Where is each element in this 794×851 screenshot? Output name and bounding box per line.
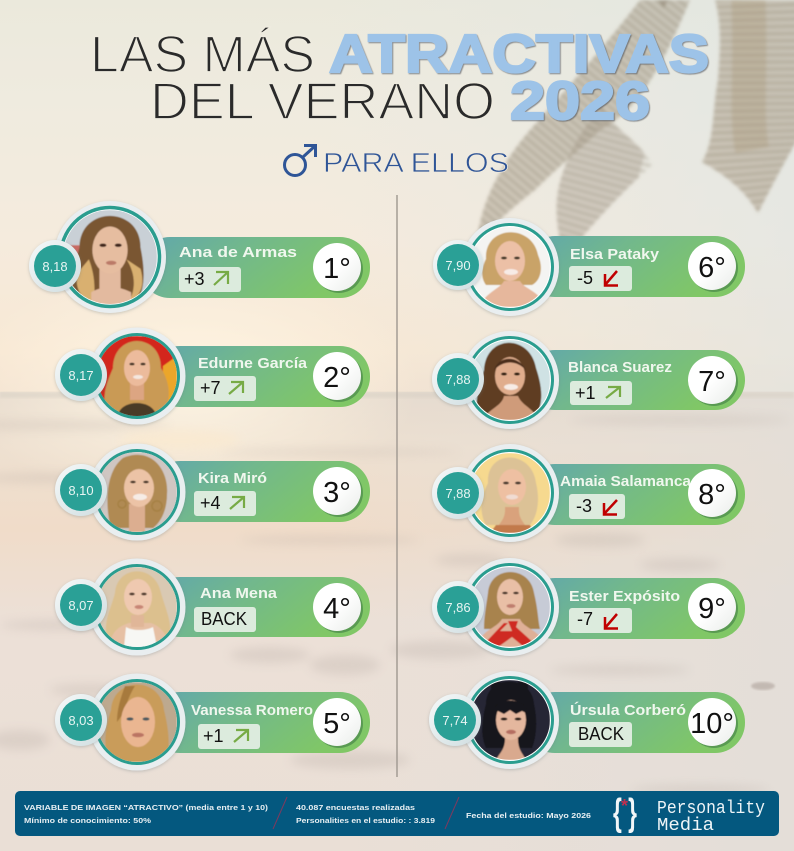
- position change: +1: [203, 726, 224, 746]
- portrait: Vanessa Romero: [88, 674, 186, 770]
- ranking row 9: Ester Expósito: [432, 558, 745, 656]
- portrait: Kira Miró: [88, 444, 186, 540]
- name: Vanessa Romero: [191, 702, 313, 719]
- score badge: 7,88: [445, 486, 471, 501]
- rank: 7°: [698, 366, 726, 398]
- score badge: 7,86: [445, 600, 471, 615]
- name pill: [150, 461, 370, 522]
- logo: Personality Media: Media: [657, 816, 714, 836]
- name: Ana de Armas: [179, 244, 297, 261]
- survey counts: Personalities en el estudio: : 3.819: [296, 816, 435, 825]
- rank: 3°: [323, 477, 351, 509]
- position change: +4: [200, 493, 221, 513]
- study variable note: [24, 803, 269, 825]
- title: DEL VERANO: [150, 73, 495, 131]
- footer bar: [15, 791, 779, 836]
- ranking row 10: Úrsula Corberó: [429, 671, 745, 769]
- rank: [313, 698, 363, 748]
- name: Edurne García: [198, 355, 308, 372]
- ranking row 1: Ana de Armas: [29, 201, 370, 313]
- score badge: [432, 467, 484, 519]
- portrait: Amaia Salamanca: [461, 444, 559, 542]
- title: LAS MÁS: [90, 26, 315, 84]
- rank: [313, 352, 363, 402]
- study variable note: VARIABLE DE IMAGEN “ATRACTIVO” (media entre 1 y 10): [24, 803, 269, 812]
- logo: Personality Media: Personality: [657, 799, 765, 819]
- rank: 9°: [698, 593, 726, 625]
- position change: [179, 267, 241, 292]
- score badge: [55, 579, 107, 631]
- name pill: [150, 692, 370, 753]
- score badge: 8,18: [42, 259, 68, 274]
- position change: [198, 724, 260, 749]
- ranking row 5: Vanessa Romero: [55, 674, 370, 770]
- rank: 5°: [323, 708, 351, 740]
- logo: Personality Media: { }: [613, 792, 637, 834]
- ranking row 8: Amaia Salamanca: [432, 444, 745, 542]
- rank: 8°: [698, 479, 726, 511]
- rank: [313, 243, 363, 293]
- name pill: [525, 692, 745, 753]
- score badge: 7,74: [442, 713, 468, 728]
- rank: [313, 467, 363, 517]
- position change: BACK: [201, 609, 247, 629]
- ranking row 4: Ana Mena: [55, 558, 370, 656]
- name: Kira Miró: [198, 470, 267, 487]
- position change: +1: [575, 383, 596, 403]
- title: [90, 24, 709, 131]
- palm fronds: [470, 0, 758, 250]
- ranking row 3: Kira Miró: [55, 444, 370, 540]
- rank: [688, 356, 738, 406]
- name pill: [525, 578, 745, 639]
- title: ATRACTIVAS: [329, 24, 709, 84]
- rank: 1°: [323, 253, 351, 285]
- rank: 10°: [690, 708, 734, 740]
- name pill: [525, 464, 745, 525]
- name: Elsa Pataky: [570, 246, 660, 263]
- rank: 6°: [698, 252, 726, 284]
- position change: [570, 381, 632, 405]
- score badge: 8,03: [68, 713, 94, 728]
- score badge: [55, 464, 107, 516]
- ranking row 2: Edurne García: [55, 328, 370, 424]
- subtitle: para ellos: PARA ELLOS: [323, 147, 509, 178]
- score badge: 8,17: [68, 368, 94, 383]
- icon: male symbol: [284, 146, 316, 176]
- score badge: [55, 349, 107, 401]
- score badge: 8,10: [68, 483, 94, 498]
- ranking row 7: Blanca Suarez: [432, 331, 745, 429]
- position change: [194, 607, 256, 632]
- study variable note: Mínimo de conocimiento: 50%: [24, 816, 151, 825]
- position change: [569, 722, 632, 747]
- position change: [569, 608, 632, 633]
- position change: +7: [200, 378, 221, 398]
- rank: [688, 698, 738, 748]
- rank: 2°: [323, 362, 351, 394]
- position change: [569, 494, 625, 519]
- portrait: Edurne García: [88, 328, 186, 424]
- portrait: Úrsula Corberó: [461, 671, 559, 769]
- name pill: [525, 350, 745, 410]
- rank: [688, 583, 738, 633]
- score badge: [29, 240, 81, 292]
- score badge: [55, 694, 107, 746]
- score badge: [433, 240, 483, 290]
- title: 2026: [510, 71, 650, 131]
- position change: BACK: [578, 724, 624, 744]
- score badge: [432, 353, 484, 405]
- rank: [688, 242, 738, 292]
- portrait: Elsa Pataky: [461, 218, 559, 316]
- score badge: [429, 694, 481, 746]
- name: Ana Mena: [200, 585, 278, 602]
- score badge: [432, 581, 484, 633]
- position change: [194, 491, 256, 516]
- portrait: Ester Expósito: [461, 558, 559, 656]
- name pill: [150, 346, 370, 407]
- name pill: [525, 236, 745, 297]
- score badge: 8,07: [68, 598, 94, 613]
- logo: Personality Media: [613, 792, 765, 836]
- portrait: Blanca Suarez: [461, 331, 559, 429]
- name: Amaia Salamanca: [560, 473, 692, 490]
- name pill: [140, 237, 370, 298]
- position change: -5: [577, 268, 593, 288]
- portrait: Ana Mena: [88, 558, 186, 656]
- position change: +3: [184, 269, 205, 289]
- ranking row 6: Elsa Pataky: [433, 218, 745, 316]
- name: Ester Expósito: [569, 588, 680, 605]
- logo: Personality Media: *: [621, 796, 628, 816]
- study date: Fecha del estudio: Mayo 2026: [466, 811, 591, 820]
- rank: [313, 583, 363, 633]
- portrait: Ana de Armas: [54, 201, 166, 313]
- name: Úrsula Corberó: [570, 701, 686, 719]
- name: Blanca Suarez: [568, 359, 672, 376]
- rank: [688, 469, 738, 519]
- name pill: [150, 577, 370, 637]
- survey counts: [296, 803, 435, 825]
- score badge: 7,90: [445, 258, 471, 273]
- rank: 4°: [323, 593, 351, 625]
- survey counts: 40.087 encuestas realizadas: [296, 803, 415, 812]
- position change: -7: [577, 609, 593, 629]
- score badge: 7,88: [445, 372, 471, 387]
- position change: -3: [576, 496, 592, 516]
- position change: [569, 266, 632, 291]
- position change: [194, 376, 256, 401]
